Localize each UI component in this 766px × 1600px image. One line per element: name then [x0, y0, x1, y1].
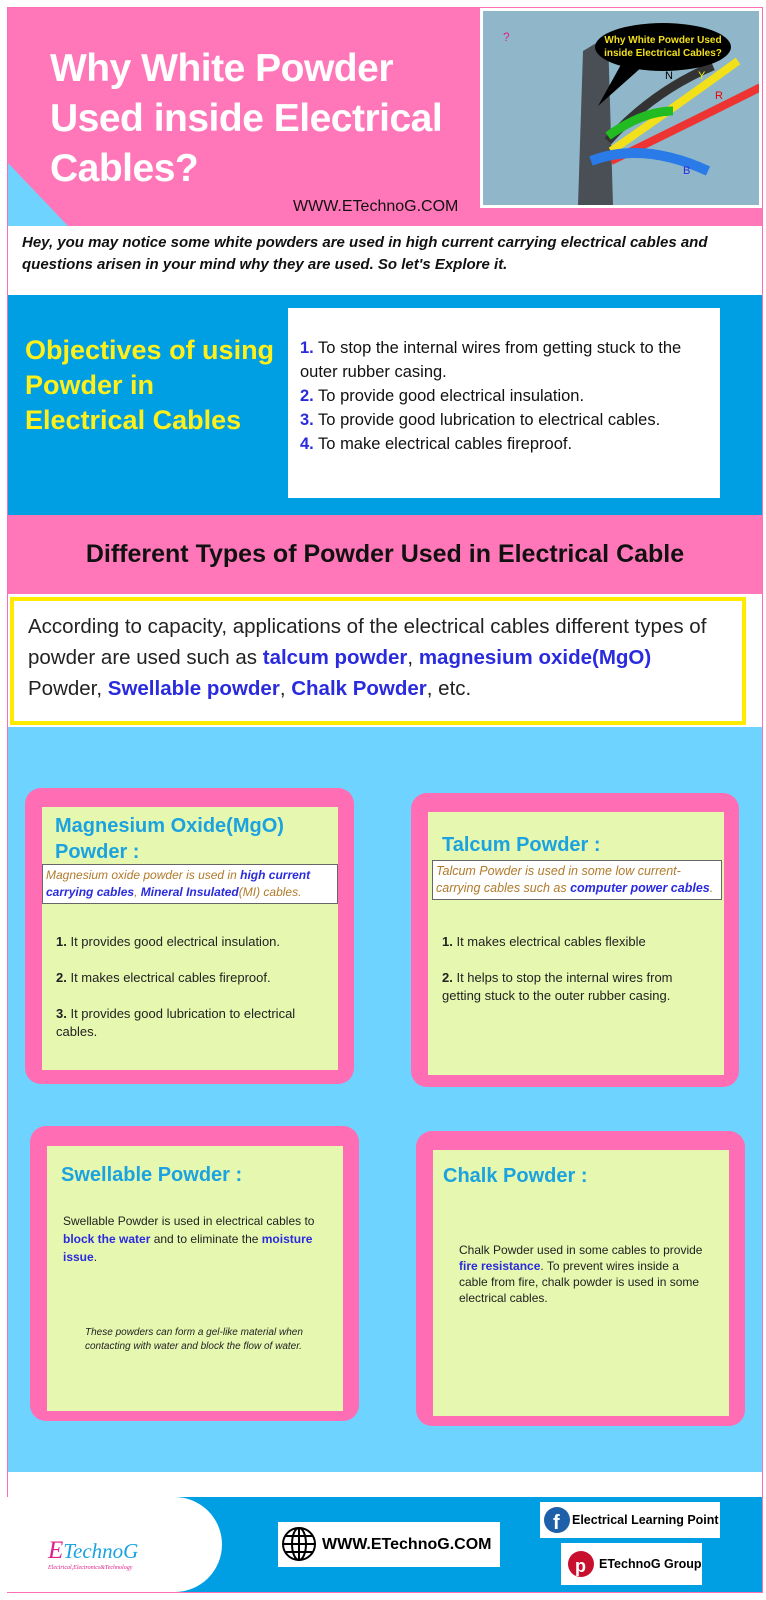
card: Chalk: Chalk Powder :: [443, 1165, 587, 1187]
title: Why White Powder Used inside Electrical Cables?: [50, 47, 442, 190]
card: MgO: 1. It provides good electrical insulation.: [56, 934, 280, 949]
card: Talcum: 2. It helps to stop the internal wires from getting stuck to the outer rubber casing.: [442, 970, 672, 1003]
objectives list: [288, 308, 720, 498]
pinterest box: p: [575, 1556, 586, 1576]
facebook box: f: [553, 1512, 560, 1534]
cable photo: inside Electrical Cables?: [604, 48, 722, 59]
intro text: Hey, you may notice some white powders are used in high current carrying electrical cables and questions arisen in your mind why they are used. So let's Explore it.: [22, 234, 708, 273]
section heading: [8, 515, 762, 594]
cable photo: N: [665, 70, 673, 82]
card: MgO: Magnesium Oxide(MgO): [55, 815, 284, 837]
card: Swellable: [30, 1126, 359, 1421]
website label: WWW.ETechnoG.COM: [293, 198, 458, 215]
card: MgO: Powder :: [55, 841, 139, 863]
header panel: [8, 8, 762, 226]
card: MgO: 3. It provides good lubrication to electrical cables.: [56, 1006, 295, 1039]
cable photo: Y: [698, 70, 706, 82]
cable photo: [480, 8, 762, 208]
objectives list: 1. To stop the internal wires from getting stuck to the outer rubber casing.: [300, 339, 681, 381]
footer: [8, 1497, 762, 1592]
logo area: [0, 1497, 222, 1592]
card: Swellable: Swellable Powder :: [61, 1164, 242, 1186]
card: Swellable: These powders can form a gel-like material when contacting with water and block the flow of water.: [85, 1327, 303, 1352]
panel: objectives: [8, 295, 762, 515]
website box: [278, 1522, 500, 1567]
facebook box: Electrical Learning Point: [572, 1513, 719, 1527]
card: Swellable: Swellable Powder is used in electrical cables to block the water and to eliminate the moisture issue.: [63, 1214, 314, 1264]
cable photo: R: [715, 90, 723, 102]
card: Chalk: Chalk Powder used in some cables to provide fire resistance. To prevent wires inside a cable from fire, chalk powder is used in some electrical cables.: [459, 1243, 702, 1305]
card: Talcum: Talcum Powder :: [442, 834, 601, 856]
logo: Electrical,Electronics&Technology: [48, 1565, 132, 1571]
objectives list: 3. To provide good lubrication to electrical cables.: [300, 411, 660, 429]
intro types text box: According to capacity, applications of the electrical cables different types of powder are used such as talcum powder, magnesium oxide(MgO) Powder, Swellable powder, Chalk Powder, etc.: [28, 615, 706, 700]
cable photo: ?: [503, 30, 510, 44]
intro types text box: [10, 597, 746, 725]
facebook box: [540, 1502, 720, 1538]
objectives list: 2. To provide good electrical insulation.: [300, 387, 584, 405]
card: Talcum: Talcum Powder is used in some low current-carrying cables such as computer power cables.: [436, 864, 713, 895]
decorative triangle: [8, 163, 68, 226]
cable photo: Why White Powder Used: [604, 35, 722, 46]
card: MgO: [25, 788, 354, 1084]
card: Chalk: [416, 1131, 745, 1426]
pinterest box: [561, 1543, 702, 1585]
website box: WWW.ETechnoG.COM: [322, 1536, 491, 1553]
cards section: [8, 727, 762, 1472]
card: MgO: Magnesium oxide powder is used in high current carrying cables, Mineral Insulated(MI) cables.: [46, 868, 310, 899]
card: Talcum: 1. It makes electrical cables flexible: [442, 934, 646, 949]
objectives heading: Objectives of using Powder in Electrical Cables: [25, 335, 274, 435]
cable photo: E: [661, 107, 668, 119]
card: Talcum: [411, 793, 739, 1087]
cable photo: B: [683, 165, 690, 177]
section heading: Different Types of Powder Used in Electrical Cable: [86, 540, 684, 568]
logo: ETechnoG: [48, 1537, 138, 1564]
objectives list: 4. To make electrical cables fireproof.: [300, 435, 572, 453]
pinterest box: ETechnoG Group: [599, 1557, 702, 1571]
card: MgO: 2. It makes electrical cables fireproof.: [56, 970, 271, 985]
